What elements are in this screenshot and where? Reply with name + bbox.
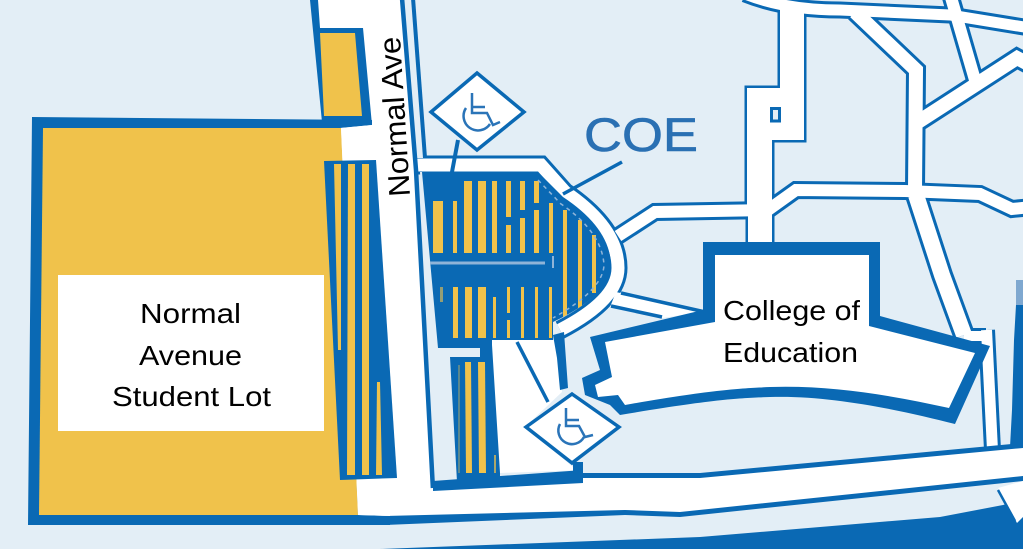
icon: north accessible parking sign [431, 73, 524, 150]
white plaza south of COE lot [490, 340, 583, 473]
COE parking lot [422, 172, 611, 348]
label box: Normal Avenue Student Lot: Student Lot [112, 381, 271, 412]
walkway from lot to building [610, 292, 703, 318]
label box: Normal Avenue Student Lot: Avenue [139, 340, 242, 371]
label: COE: COE [584, 108, 698, 161]
small north lot [310, 0, 372, 125]
angled stalls beside Normal Ave [324, 160, 397, 480]
label: College of Education: College of [723, 295, 860, 326]
blue edge between plaza and lawn [553, 332, 568, 390]
main east-west road [358, 443, 1023, 525]
label: College of Education [723, 295, 860, 368]
eastern thick line [1010, 280, 1023, 447]
label box: Normal Avenue Student Lot: Normal [140, 298, 241, 329]
white arrowhead road junction [998, 481, 1023, 523]
leader line to COE label [563, 162, 622, 194]
label box: Normal Avenue Student Lot [58, 275, 324, 431]
pathway network [415, 0, 1023, 450]
label: Normal Ave: Normal Ave [374, 36, 417, 198]
connector to north accessible sign [452, 140, 458, 172]
building interior [595, 255, 975, 408]
Normal Avenue road [318, 0, 457, 520]
label: College of Education: Education [723, 337, 858, 368]
College of Education building [582, 242, 990, 424]
south stalls [450, 345, 500, 482]
icon: south accessible parking sign [526, 394, 619, 463]
dark bottom edge [380, 500, 1023, 549]
connector to south accessible sign [517, 342, 548, 402]
Normal Avenue Student Lot [28, 117, 395, 525]
small post at south lot base [573, 462, 583, 476]
